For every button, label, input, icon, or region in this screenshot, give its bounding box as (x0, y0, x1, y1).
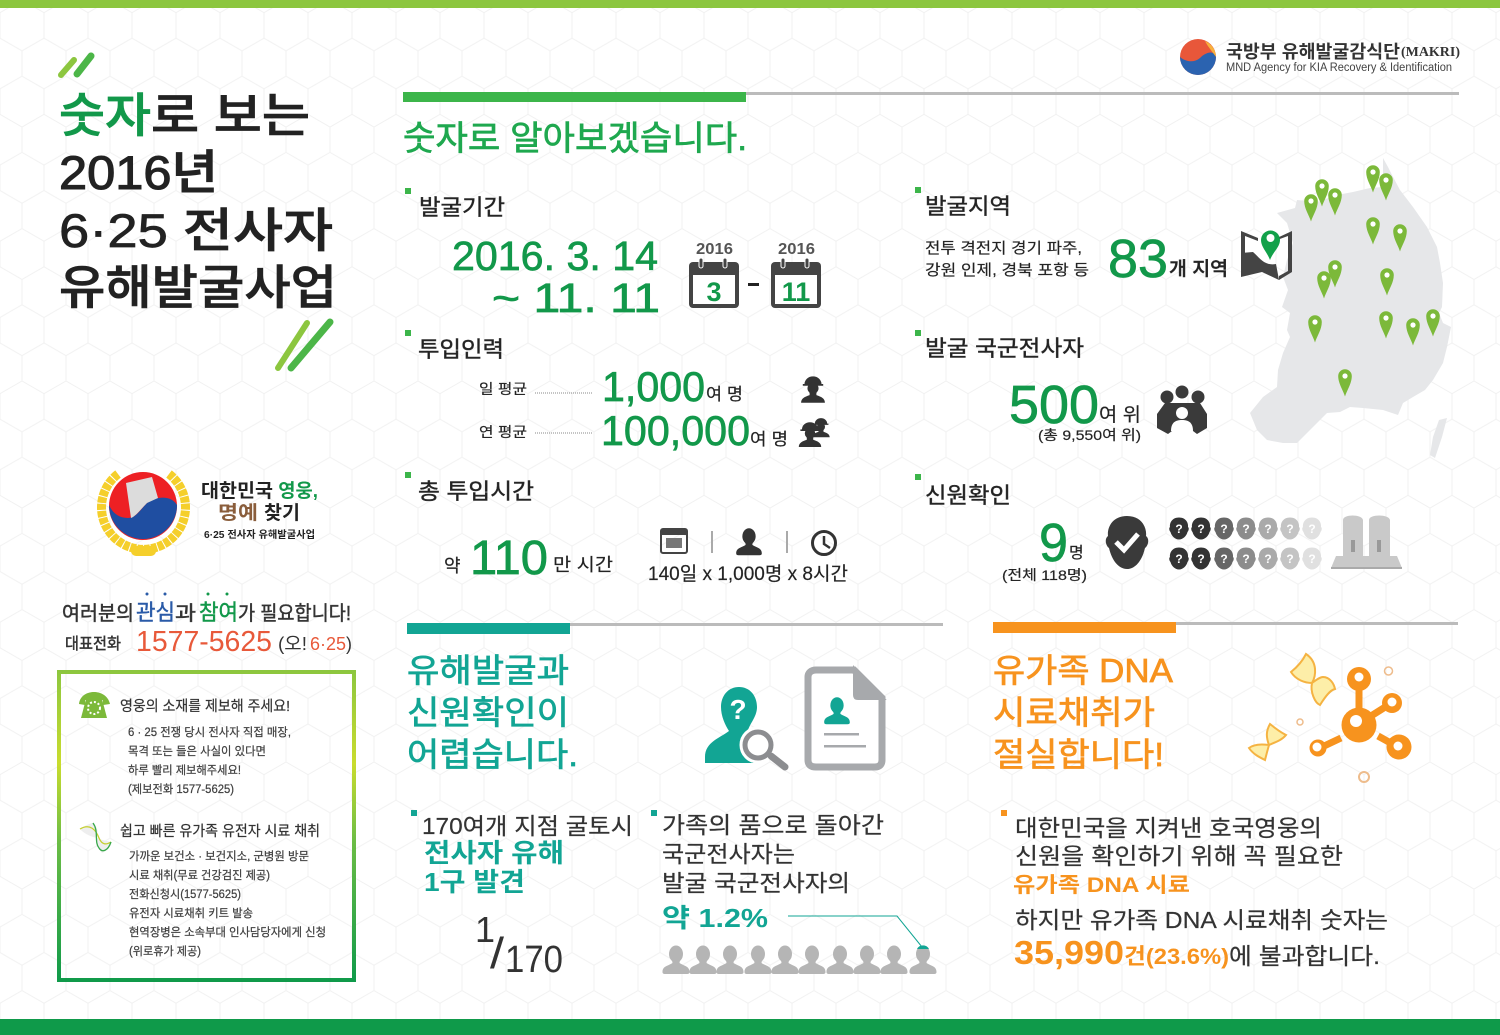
panel: how to help box: 6 · 25 전쟁 당시 전사자 직접 매장, (128, 726, 291, 739)
panel: 유해발굴과 신원확인 (407, 623, 943, 981)
emblem slogan: 명예 (218, 502, 258, 524)
stat: 투입인력: 100,000 (601, 407, 750, 454)
stat: 총 투입시간: 110 (470, 532, 548, 585)
stat: 발굴기간: ~ 11. 11 (492, 275, 660, 321)
MAKRI logo: 국방부 유해발굴감식단 (1226, 42, 1400, 62)
call to action: 관심 (136, 600, 175, 625)
section heading: 숫자로 알아보겠습니다: 숫자로 알아보겠습니다. (403, 120, 747, 158)
panel: how to help box: 전화신청시(1577-5625) (129, 888, 241, 901)
panel: 유해발굴과 신원확인: 신원확인이 (407, 694, 569, 731)
stat: 발굴 국군전사자: 500 (1009, 375, 1099, 435)
icon: calendars: 2016 (778, 241, 815, 258)
icon: document (808, 670, 882, 767)
text: 170 sites: 1 (475, 909, 495, 950)
icon: location pins (1304, 165, 1440, 396)
panel: how to help box: 가까운 보건소 · 보건지소, 군병원 방문 (129, 849, 309, 863)
stat: 투입인력: 여 명 (706, 385, 743, 404)
MAKRI logo: MND Agency for KIA Recovery & Identification (1226, 62, 1452, 74)
text: 170 sites: 170 (505, 939, 563, 981)
stat: 총 투입시간 (405, 472, 848, 585)
stat: 신원확인: 9 (1039, 513, 1068, 573)
call to action: 1577-5625 (136, 626, 272, 658)
stat: 총 투입시간: 만 시간 (553, 555, 613, 575)
panel: 유해발굴과 신원확인: 어렵습니다. (407, 736, 578, 773)
icon: top slashes (61, 56, 91, 75)
map of Korea with pins (1250, 158, 1451, 458)
icon: bottom slashes (278, 322, 330, 368)
panel: how to help box (59, 672, 354, 980)
stat: 투입인력 (405, 330, 830, 454)
title block: 2016년 (59, 146, 218, 199)
text: DNA appeal: 건(23.6%) (1124, 944, 1229, 969)
icon: monument (1331, 516, 1402, 569)
panel: 유해발굴과 신원확인: 유해발굴과 (407, 652, 569, 689)
emblem slogan: 영웅, (273, 480, 318, 502)
icon: workers (799, 376, 830, 447)
emblem slogan: 대한민국 (201, 480, 273, 502)
icon: DNA and molecule (1249, 654, 1412, 782)
emblem slogan: 6·25 전사자 유해발굴사업 (204, 528, 315, 541)
stat: 발굴지역: 강원 인제, 경북 포항 등 (925, 262, 1089, 279)
call to action: 대표전화 (65, 635, 121, 653)
icon: small dna (80, 823, 111, 853)
stat: 발굴지역: 83 (1108, 229, 1168, 289)
icon: day person clock (661, 528, 836, 555)
call to action: 가 필요합니다! (238, 602, 351, 625)
stat: 투입인력: 1,000 (602, 363, 705, 410)
panel: how to help box: 시료 채취(무료 건강검진 제공) (129, 869, 270, 882)
text: DNA appeal (1001, 810, 1388, 971)
icon: map with pin (1241, 231, 1292, 280)
icon: calendars: 3 (706, 277, 722, 307)
icon: unknown heads (1169, 518, 1322, 570)
text: DNA appeal: 신원을 확인하기 위해 꼭 필요한 (1015, 843, 1343, 869)
stat: 투입인력: 연 평균 (479, 424, 527, 440)
MAKRI logo (1180, 39, 1460, 75)
section heading: 숫자로 알아보겠습니다 (403, 92, 1459, 158)
call to action (62, 592, 352, 658)
icon: unknown person with magnifier (705, 687, 785, 767)
icon: row of ten people (662, 945, 936, 974)
panel: 유가족 DNA: 시료채취가 (993, 694, 1155, 731)
text: 1.2 percent: 국군전사자는 (662, 841, 795, 867)
stat: 발굴 국군전사자: 여 위 (1099, 404, 1141, 426)
title block: 6·25 전사자 (59, 204, 333, 257)
stat: 신원확인 (915, 474, 1402, 583)
stat: 발굴 국군전사자: (총 9,550여 위) (1038, 427, 1141, 443)
icon: group of people (1157, 386, 1207, 434)
icon: unknown person with magnifier: ? (729, 694, 747, 725)
call to action: 참여 (199, 600, 238, 625)
panel: 유가족 DNA (993, 622, 1458, 971)
call to action: ) (346, 634, 352, 654)
icon: calendars: 11 (782, 277, 810, 307)
icon: calendars (689, 241, 821, 308)
panel: how to help box: 하루 빨리 제보해주세요! (128, 763, 241, 777)
stat: 발굴지역: 개 지역 (1169, 258, 1228, 280)
panel: how to help box: 목격 또는 들은 사실이 있다면 (128, 744, 266, 758)
text: 170 sites: / (490, 929, 505, 978)
panel: 유가족 DNA: 유가족 DNA (993, 652, 1173, 689)
text: 170 sites: 170여개 지점 굴토시 (422, 813, 633, 839)
text: DNA appeal: 35,990 (1014, 934, 1124, 971)
panel: how to help box: (제보전화 1577-5625) (128, 783, 234, 796)
stat: 신원확인: 명 (1069, 544, 1084, 562)
stat: 투입인력: 일 평균 (479, 381, 527, 397)
stat: 신원확인: (전체 118명) (1002, 567, 1087, 583)
stat: 발굴기간 (405, 188, 821, 321)
title block (59, 56, 337, 368)
text: DNA appeal: 에 불과합니다. (1229, 943, 1380, 969)
emblem slogan: 찾기 (264, 502, 300, 524)
icon: calendars: 2016 (696, 241, 733, 258)
call to action: 여러분의 (62, 602, 134, 625)
emblem slogan (201, 480, 318, 541)
MAKRI logo: (MAKRI) (1401, 45, 1460, 60)
text: 170 sites: 전사자 유해 (424, 838, 564, 868)
stat: 발굴기간: 발굴기간 (419, 195, 505, 220)
text: 1.2 percent: 가족의 품으로 돌아간 (662, 812, 884, 838)
panel: how to help box: (위로휴가 제공) (129, 945, 201, 958)
stat: 총 투입시간: 140일 x 1,000명 x 8시간 (648, 563, 848, 585)
panel: how to help box: 영웅의 소재를 제보해 주세요! (120, 698, 290, 715)
stat: 신원확인: 신원확인 (925, 483, 1011, 508)
stat: 투입인력: 투입인력 (418, 337, 504, 362)
call to action: 6·25 (310, 634, 346, 654)
title block: 로 보는 (151, 89, 310, 142)
stat: 발굴기간: 2016. 3. 14 (452, 233, 658, 279)
emblem logo (102, 472, 186, 556)
stat: 발굴지역: 전투 격전지 경기 파주, (925, 240, 1082, 257)
text: DNA appeal: 하지만 유가족 DNA 시료채취 숫자는 (1015, 907, 1388, 933)
stat: 투입인력: 여 명 (750, 430, 788, 449)
text: 1.2 percent (651, 810, 936, 974)
panel: 유가족 DNA: 절실합니다! (993, 736, 1164, 773)
icon: telephone (79, 692, 110, 718)
stat: 발굴지역: 발굴지역 (925, 194, 1011, 219)
panel: how to help box: 쉽고 빠른 유가족 유전자 시료 채취 (120, 823, 320, 840)
title block: 숫자 (59, 89, 151, 142)
text: 170 sites: 1구 발견 (424, 867, 525, 897)
title block: 유해발굴사업 (59, 261, 337, 314)
text: 1.2 percent: 발굴 국군전사자의 (662, 870, 850, 896)
call to action: 과 (175, 602, 196, 625)
stat: 발굴 국군전사자: 발굴 국군전사자 (925, 336, 1084, 361)
panel: how to help box: 현역장병은 소속부대 인사담당자에게 신청 (129, 926, 326, 939)
stat: 발굴지역 (915, 187, 1292, 289)
text: 170 sites (411, 810, 633, 981)
stat: 총 투입시간: 총 투입시간 (418, 479, 534, 504)
text: DNA appeal: 유가족 DNA 시료 (1013, 874, 1190, 897)
panel: how to help box: 유전자 시료채취 키트 발송 (129, 907, 253, 920)
stat: 발굴 국군전사자 (915, 330, 1207, 443)
icon: head with check (1106, 516, 1148, 569)
call to action: (오! (278, 634, 307, 654)
text: DNA appeal: 대한민국을 지켜낸 호국영웅의 (1015, 815, 1322, 841)
stat: 총 투입시간: 약 (444, 556, 461, 576)
text: 1.2 percent: 약 1.2% (662, 903, 768, 933)
